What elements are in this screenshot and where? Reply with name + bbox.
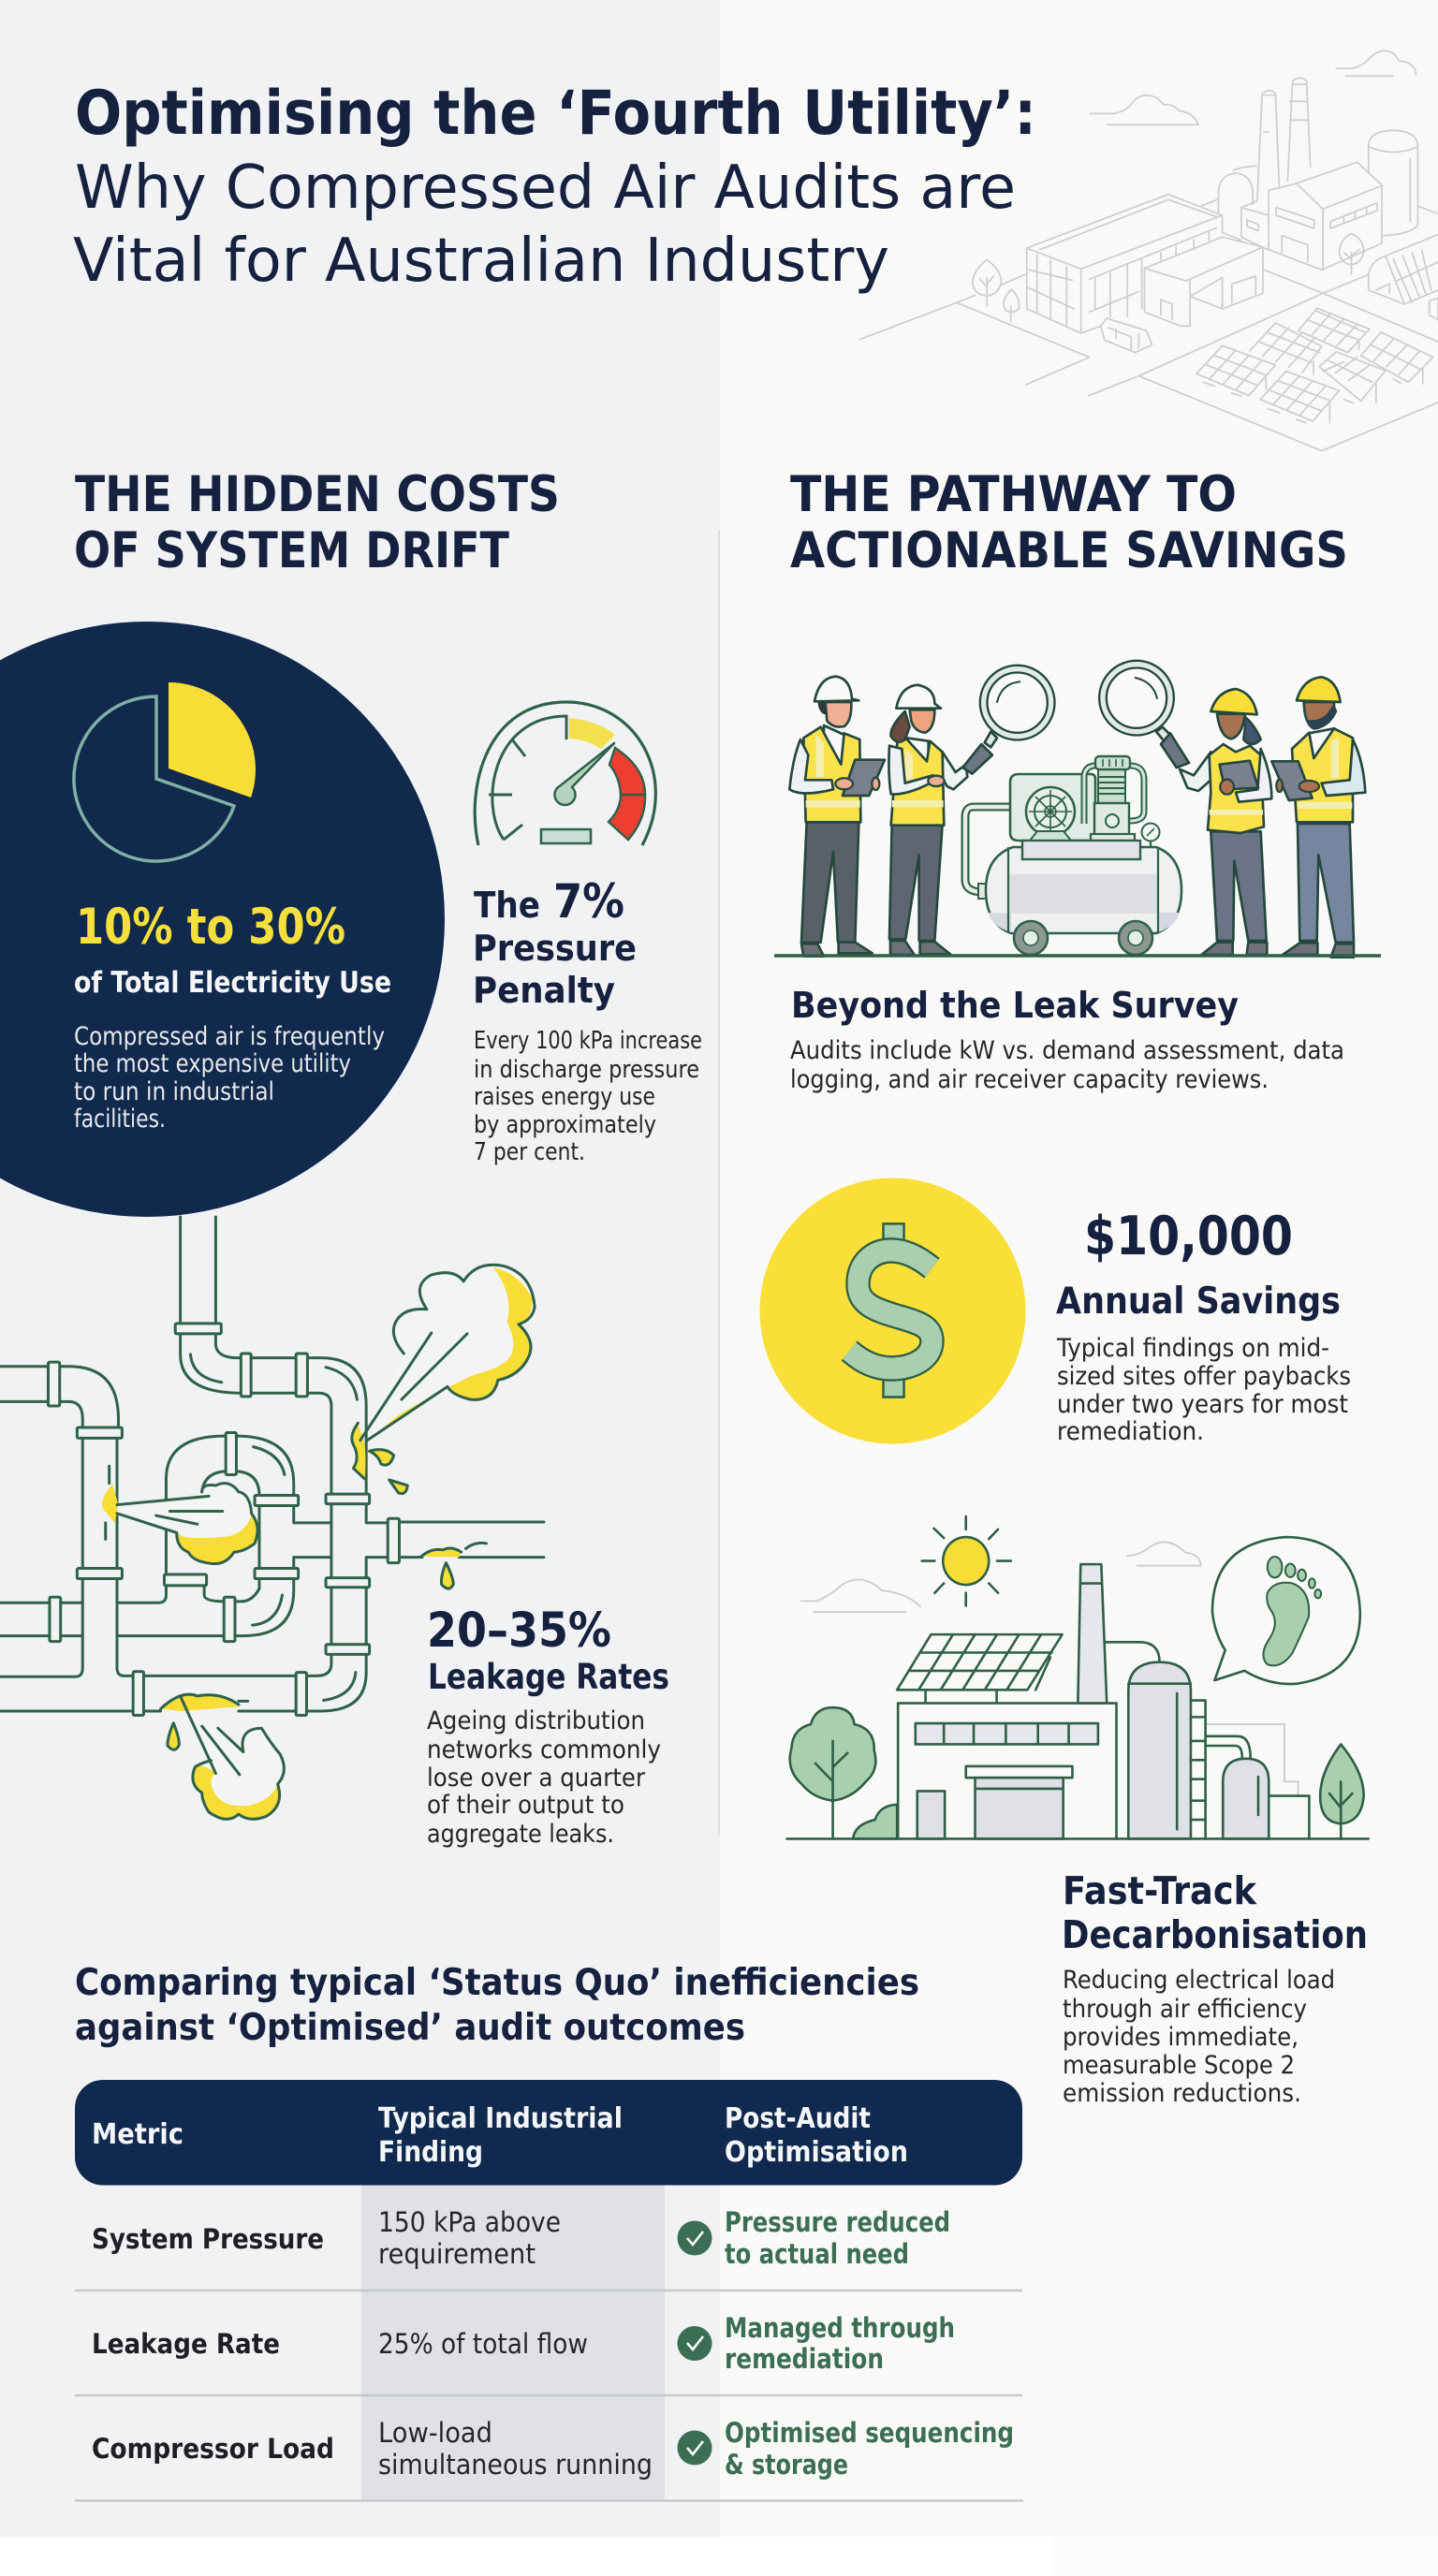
- body text: in discharge pressure: [474, 1056, 699, 1084]
- body text: to run in industrial: [74, 1077, 274, 1106]
- leak: small pipe crack: [421, 1543, 487, 1588]
- body text: sized sites offer paybacks: [1057, 1362, 1351, 1391]
- illustration: isometric industrial site line art: [859, 51, 1438, 451]
- title: Vital for Australian Industry: [73, 227, 889, 296]
- row: compressor load: [92, 2417, 1014, 2481]
- row: leakage rate: 25% of total flow: [378, 2328, 588, 2360]
- row: compressor load: Optimised sequencing: [725, 2417, 1014, 2449]
- row: leakage rate: Managed through: [725, 2312, 955, 2344]
- heading: table title: [75, 1962, 919, 2049]
- panel: leakage rates text: Leakage Rates: [428, 1657, 669, 1697]
- leak: top right cloud: [352, 1265, 535, 1494]
- leak: centre cloud: [102, 1466, 257, 1564]
- body text: the most expensive utility: [74, 1049, 351, 1078]
- panel: beyond the leak survey: [774, 665, 1381, 1094]
- heading: the pathway: THE PATHWAY TO: [790, 466, 1237, 523]
- table header: Post-Audit: [725, 2102, 871, 2135]
- illustration: leaking pipe network: [0, 1217, 544, 1819]
- table header: Metric: [92, 2118, 183, 2151]
- icon: dollar coin: [760, 1178, 1026, 1443]
- table header: Typical Industrial: [378, 2102, 623, 2135]
- body text: raises energy use: [474, 1083, 655, 1111]
- body text: by approximately: [474, 1111, 656, 1139]
- row: system pressure: to actual need: [725, 2238, 909, 2270]
- panel: pressure penalty: [473, 702, 702, 1166]
- body text: emission reductions.: [1063, 2079, 1301, 2108]
- heading: Fast-Track: [1063, 1868, 1258, 1913]
- body text: [1056, 1334, 1351, 1446]
- body text: measurable Scope 2: [1063, 2051, 1295, 2080]
- body text: through air efficiency: [1063, 1995, 1307, 2024]
- status quo column shading: [361, 2185, 665, 2500]
- body text: logging, and air receiver capacity reviews.: [790, 1065, 1269, 1094]
- heading: table title: against ‘Optimised’ audit outcomes: [75, 2007, 745, 2049]
- panel: leakage rates text: 20–35%: [427, 1603, 611, 1659]
- body text: facilities.: [74, 1105, 166, 1134]
- heading: the 7% pressure penalty: The: [474, 885, 540, 926]
- heading: table title: Comparing typical ‘Status Quo’ inefficiencies: [75, 1962, 919, 2004]
- illustration: green factory: [787, 1516, 1369, 1838]
- stat label: of Total Electricity Use: [74, 966, 391, 1000]
- stat: $10,000: $10,000: [1084, 1206, 1293, 1267]
- body text: of their output to: [427, 1791, 624, 1820]
- icon: pressure gauge: [475, 702, 655, 845]
- row: system pressure: Pressure reduced: [725, 2206, 950, 2238]
- body text: Typical findings on mid-: [1056, 1334, 1329, 1363]
- heading: the pathway: ACTIONABLE SAVINGS: [790, 522, 1348, 579]
- body text: [474, 1027, 702, 1166]
- row: leakage rate: Leakage Rate: [92, 2328, 280, 2360]
- body text: 7 per cent.: [474, 1138, 585, 1166]
- heading: the pathway: [790, 466, 1348, 579]
- row: system pressure: [92, 2206, 950, 2270]
- body text: [790, 1036, 1344, 1094]
- title: [73, 79, 1036, 296]
- stat: 10% to 30%: 10% to 30%: [76, 899, 345, 956]
- body text: [427, 1706, 661, 1849]
- row: system pressure: 150 kPa above: [378, 2206, 561, 2238]
- row: compressor load: & storage: [725, 2449, 848, 2481]
- heading: Decarbonisation: [1062, 1912, 1368, 1957]
- row: system pressure: requirement: [378, 2238, 536, 2270]
- stat label: Annual Savings: [1056, 1281, 1341, 1323]
- body text: under two years for most: [1057, 1390, 1348, 1419]
- body text: Every 100 kPa increase: [474, 1027, 702, 1055]
- body text: aggregate leaks.: [427, 1820, 614, 1849]
- heading: [1062, 1868, 1368, 1957]
- row: leakage rate: remediation: [725, 2343, 884, 2375]
- illustration: left auditors: [789, 669, 1051, 957]
- heading: the hidden costs: OF SYSTEM DRIFT: [74, 522, 509, 579]
- title: Optimising the ‘Fourth Utility’:: [75, 79, 1036, 149]
- body text: provides immediate,: [1063, 2023, 1299, 2052]
- heading: the 7% pressure penalty: [473, 874, 637, 1011]
- illustration: compressor: [965, 756, 1181, 955]
- body text: Audits include kW vs. demand assessment, data: [790, 1036, 1344, 1065]
- heading: the hidden costs: [74, 466, 560, 579]
- illustration: right auditors: [1103, 665, 1365, 958]
- table header: [75, 2080, 1022, 2185]
- row: system pressure: System Pressure: [92, 2223, 324, 2255]
- row: compressor load: simultaneous running: [378, 2449, 653, 2481]
- ground line: [774, 954, 1381, 958]
- leak: bottom cloud: [161, 1694, 284, 1819]
- body text: networks commonly: [427, 1735, 661, 1764]
- body text: Ageing distribution: [427, 1706, 645, 1735]
- heading: the 7% pressure penalty: Pressure: [473, 928, 637, 969]
- row: leakage rate: [92, 2312, 955, 2375]
- table header: Finding: [378, 2136, 483, 2169]
- panel: leakage rates text: [427, 1603, 669, 1849]
- body text: [1063, 1966, 1335, 2108]
- body text: [74, 1022, 385, 1134]
- title: Why Compressed Air Audits are: [75, 154, 1016, 223]
- body text: Compressed air is frequently: [74, 1022, 385, 1051]
- heading: the 7% pressure penalty: Penalty: [473, 970, 615, 1011]
- icon: pie chart: [74, 682, 256, 861]
- panel: annual savings: [760, 1178, 1351, 1446]
- comparison table: [75, 2080, 1023, 2501]
- body text: remediation.: [1057, 1417, 1204, 1446]
- row: compressor load: Compressor Load: [92, 2433, 334, 2465]
- panel: decarbonisation: [787, 1516, 1369, 2108]
- row: compressor load: Low-load: [378, 2417, 492, 2449]
- table header: Optimisation: [725, 2136, 908, 2169]
- body text: lose over a quarter: [427, 1764, 646, 1793]
- panel: electricity use circle: [0, 622, 445, 1217]
- heading: the hidden costs: THE HIDDEN COSTS: [75, 466, 560, 523]
- body text: Reducing electrical load: [1063, 1966, 1335, 1995]
- heading: Beyond the Leak Survey: [791, 985, 1239, 1026]
- heading: the 7% pressure penalty: 7%: [553, 874, 624, 929]
